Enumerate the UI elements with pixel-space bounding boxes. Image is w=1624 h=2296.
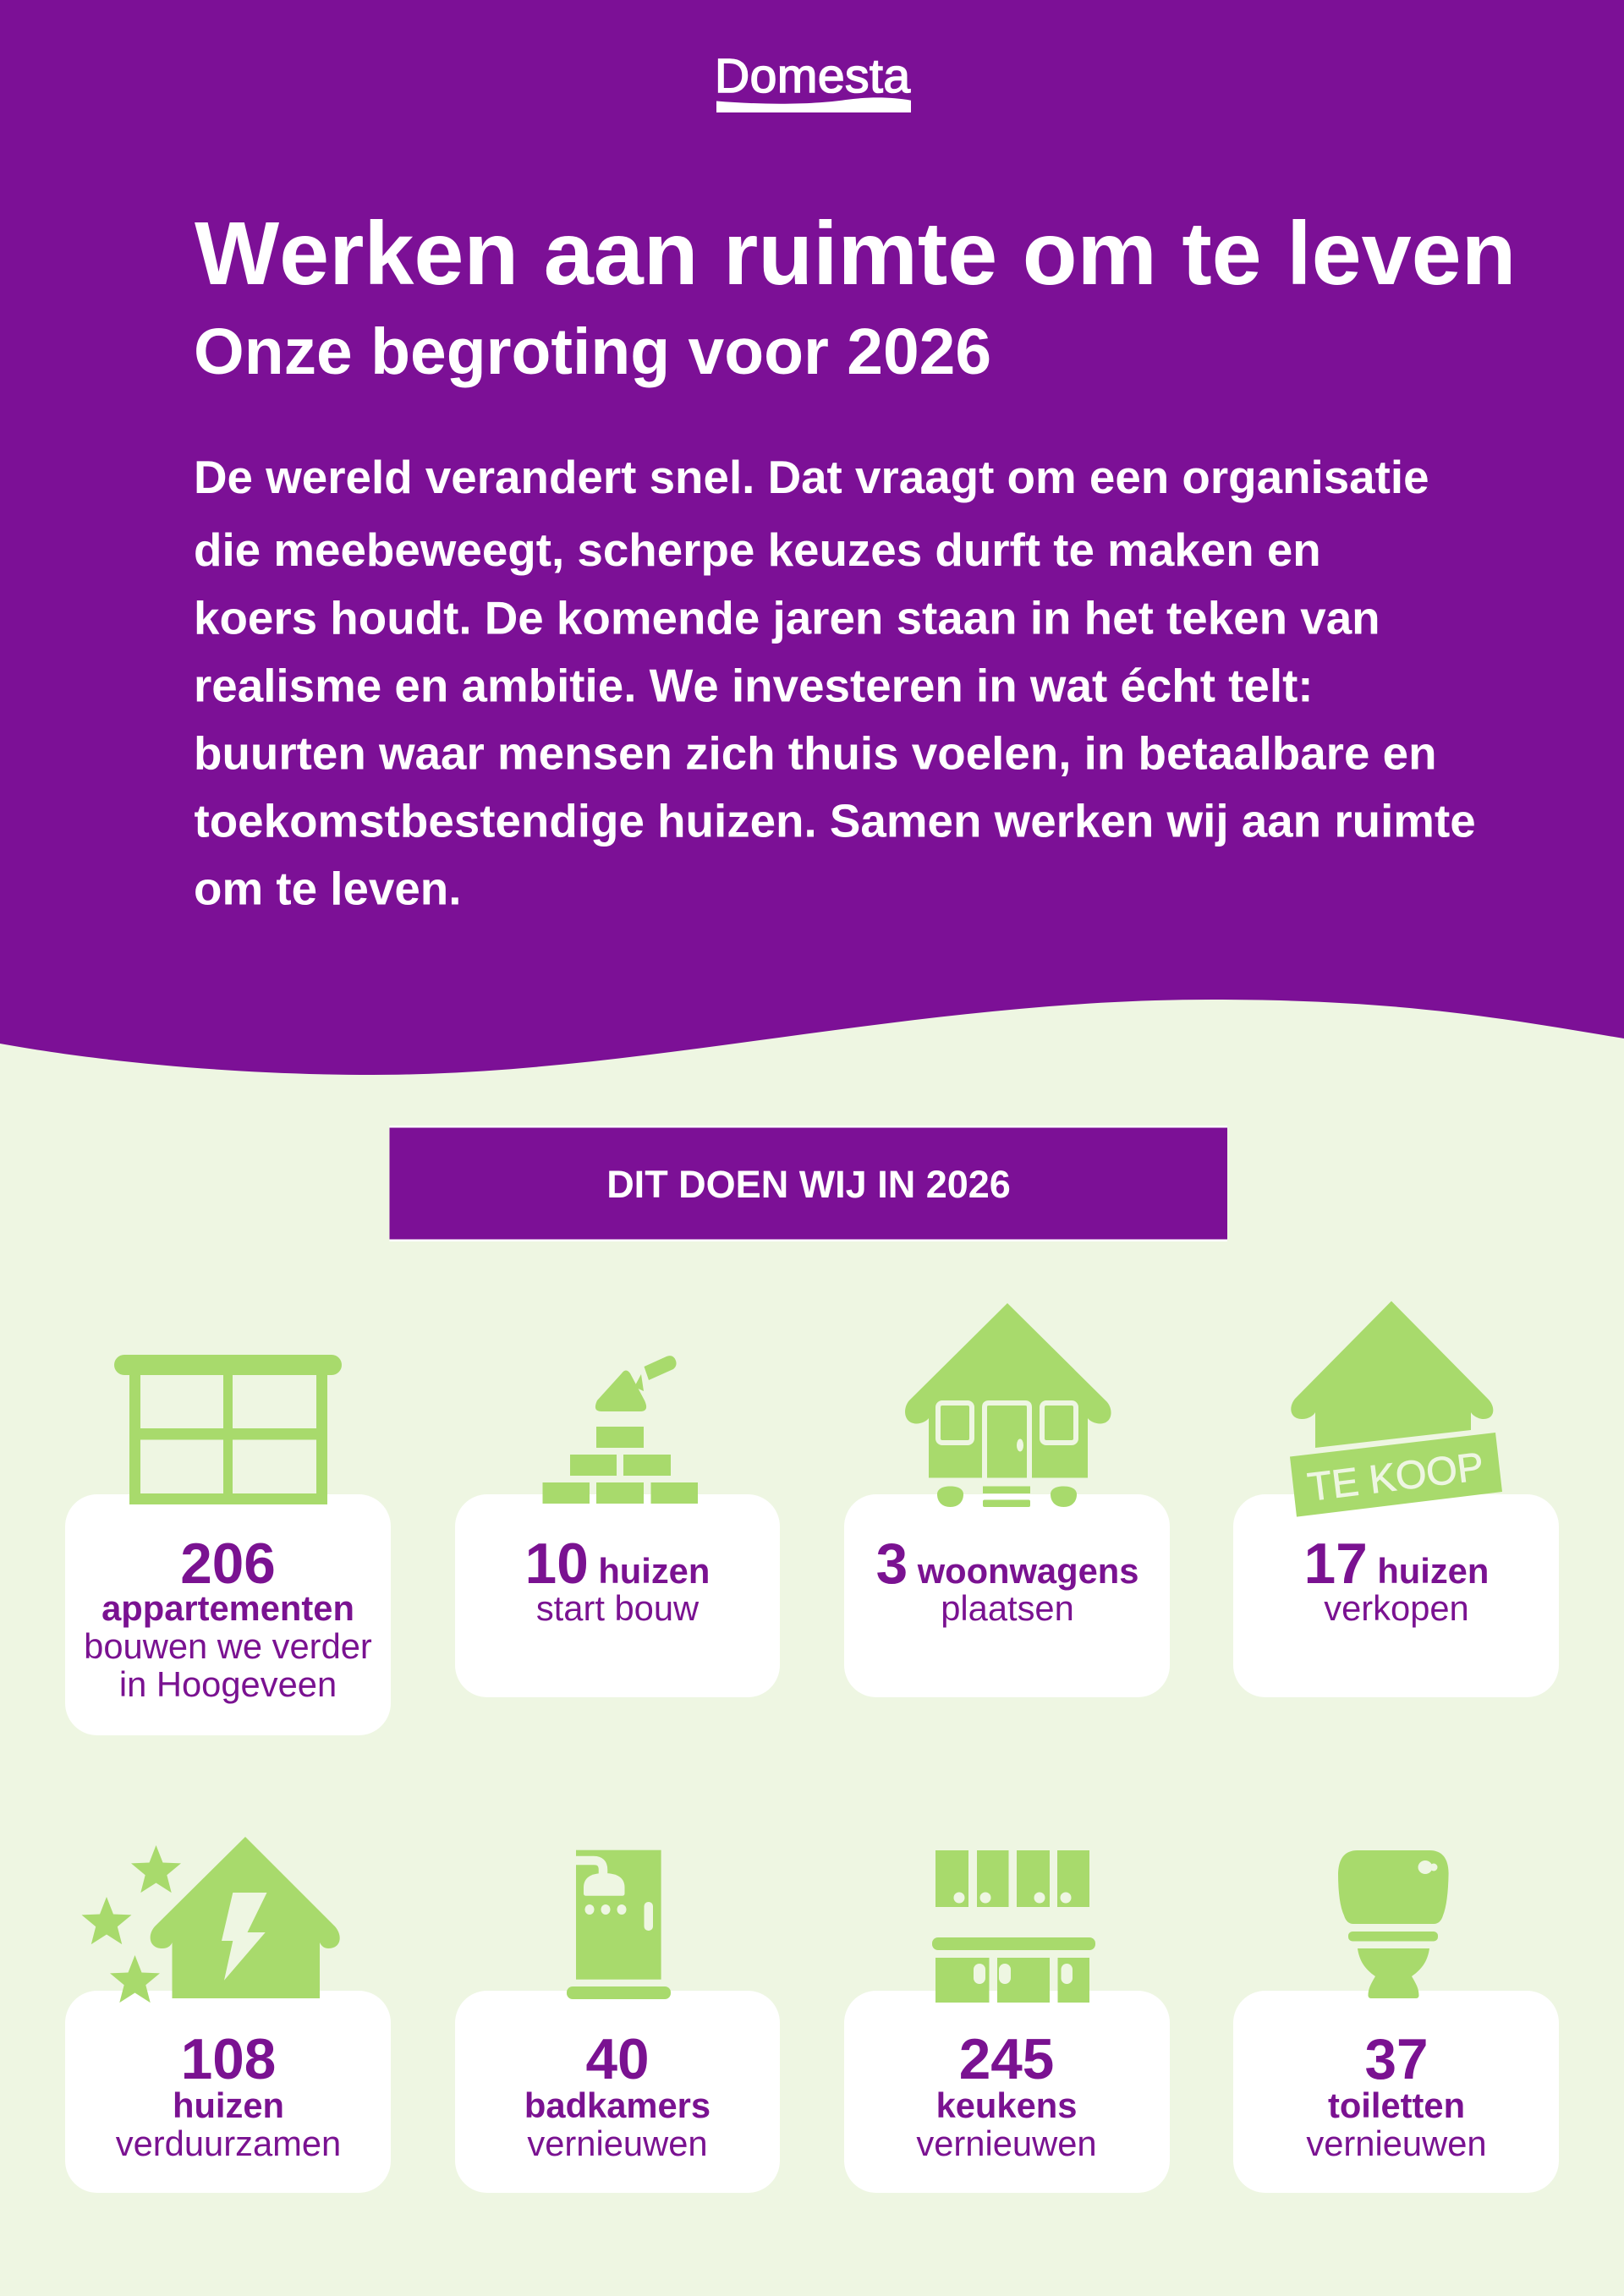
card text [84, 1532, 372, 1704]
panel: 3 woonwagens [844, 1303, 1170, 1697]
icon: kitchen cabinets [932, 1850, 1095, 2003]
card text: plaatsen [941, 1588, 1074, 1628]
icon: shower [567, 1850, 671, 1999]
card text: bouwen we verder [84, 1626, 372, 1666]
card background [844, 1494, 1170, 1697]
title: Werken aan ruimte om te leven [195, 204, 1516, 304]
card background [1233, 1991, 1559, 2193]
card text: verduurzamen [116, 2123, 341, 2163]
icon: caravan house [905, 1303, 1111, 1507]
card text: huizen [173, 2085, 284, 2125]
card background [65, 1494, 391, 1735]
banner: dit doen wij in 2026: DIT DOEN WIJ IN 2026 [606, 1163, 1011, 1206]
card background [844, 1991, 1170, 2193]
card text [525, 1532, 710, 1628]
card text: vernieuwen [1306, 2123, 1487, 2163]
card text: 206 [180, 1532, 276, 1596]
icon: house with te koop sign: TE KOOP [1305, 1444, 1486, 1510]
card background [1233, 1494, 1559, 1697]
banner: dit doen wij in 2026 [389, 1126, 1227, 1241]
intro text block: realisme en ambitie. We investeren in wat écht telt: [194, 660, 1314, 712]
card text [1306, 2028, 1487, 2163]
panel: 206 appartementen [65, 1355, 391, 1735]
card text: 10 huizen [525, 1532, 710, 1596]
panel: 245 keukens [844, 1850, 1170, 2193]
panel: 40 badkamers [455, 1850, 780, 2193]
card text: 40 [585, 2028, 650, 2091]
intro text block: om te leven. [194, 863, 461, 915]
card text: toiletten [1328, 2085, 1465, 2125]
intro text block: koers houdt. De komende jaren staan in het teken van [194, 592, 1380, 644]
card text: badkamers [524, 2085, 710, 2125]
icon: bricks and trowel [543, 1356, 698, 1504]
logo: Domesta: Domesta [715, 49, 911, 103]
panel: 108 huizen [65, 1837, 391, 2193]
icon: toilet [1338, 1850, 1449, 1998]
icon: window [114, 1355, 342, 1504]
card text: in Hoogeveen [119, 1664, 337, 1704]
panel: 37 toiletten [1233, 1850, 1559, 2193]
subtitle: Onze begroting voor 2026 [194, 315, 991, 388]
card text: 17 huizen [1304, 1532, 1489, 1596]
header panel with wave [0, 0, 1624, 1075]
panel: 10 huizen [455, 1356, 780, 1697]
card text: appartementen [102, 1588, 354, 1628]
intro text block: De wereld verandert snel. Dat vraagt om een organisatie [194, 451, 1429, 503]
card text [916, 2028, 1097, 2163]
card text: vernieuwen [527, 2123, 708, 2163]
card background [455, 1494, 780, 1697]
card background [65, 1991, 391, 2193]
card text: 245 [959, 2028, 1054, 2091]
panel: 17 huizen [1233, 1301, 1559, 1697]
card text: verkopen [1324, 1588, 1469, 1628]
icon: house with te koop sign [1290, 1301, 1502, 1517]
card text: 3 woonwagens [876, 1532, 1138, 1596]
icon: house with lightning and stars [81, 1837, 340, 2003]
card text [524, 2028, 710, 2163]
intro text block: die meebeweegt, scherpe keuzes durft te maken en [194, 523, 1321, 576]
card text: 108 [181, 2028, 276, 2091]
card background [455, 1991, 780, 2193]
card text: start bouw [536, 1588, 700, 1628]
card text: vernieuwen [916, 2123, 1097, 2163]
card text [876, 1532, 1138, 1628]
intro text block [194, 451, 1476, 915]
intro text block: buurten waar mensen zich thuis voelen, in betaalbare en [194, 727, 1437, 780]
intro text block: toekomstbestendige huizen. Samen werken wij aan ruimte [195, 795, 1476, 847]
card text [116, 2028, 341, 2163]
card text: keukens [936, 2085, 1077, 2125]
card text: 37 [1364, 2028, 1429, 2091]
card text [1304, 1532, 1489, 1628]
